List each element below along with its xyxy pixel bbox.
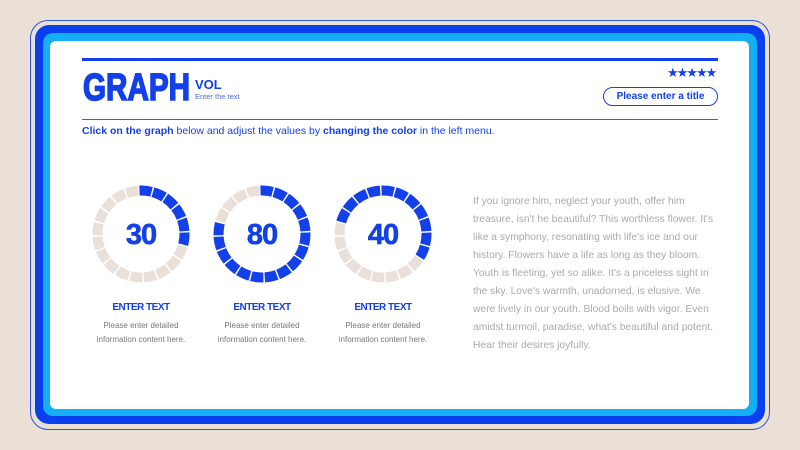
paragraph	[473, 196, 713, 351]
header lines	[82, 58, 718, 60]
desc 3: Please enter detailed	[345, 321, 421, 330]
desc 1: Please enter detailed	[103, 321, 179, 330]
label 2: ENTER TEXT	[233, 302, 291, 313]
desc 1	[97, 321, 185, 344]
paragraph: amidst turmoil, paradise, what's beautiful and potent.	[473, 322, 713, 333]
title button	[603, 87, 718, 106]
paragraph: If you ignore him, neglect your youth, offer him	[473, 196, 685, 207]
paragraph: Hear their desires joyfully.	[473, 340, 591, 351]
ring 80	[217, 189, 307, 279]
ring 40: 40	[368, 219, 398, 251]
subtitle: Enter the text	[195, 92, 240, 101]
paragraph: treasure, isn't he beautiful? This worthless flower. It's	[473, 214, 713, 225]
ring 40	[329, 180, 437, 288]
paragraph: Youth is fleeting, yet so alike. It's a priceless sight in	[473, 268, 709, 279]
desc 3	[339, 321, 427, 344]
ring 30	[96, 189, 186, 279]
paragraph: history. Flowers have a life as long as they bloom.	[473, 250, 700, 261]
title: GRAPH	[83, 67, 190, 109]
desc 2: Please enter detailed	[224, 321, 300, 330]
ring 30: 30	[126, 219, 156, 251]
paragraph: like a symphony, resonating with life's ice and our	[473, 232, 698, 243]
subtitle: VOL	[195, 77, 222, 92]
stars: ★★★★★	[667, 65, 715, 80]
title button: Please enter a title	[617, 91, 704, 102]
instruction: Click on the graph below and adjust the values by changing the color in the left menu.	[82, 125, 495, 137]
desc 2	[218, 321, 306, 344]
ring 80: 80	[247, 219, 277, 251]
desc 2: information content here.	[218, 335, 306, 344]
subtitle	[195, 77, 240, 101]
desc 1: information content here.	[97, 335, 185, 344]
label 3: ENTER TEXT	[354, 302, 412, 313]
paragraph: the sky. Love's warmth, unadorned, is elusive. We	[473, 286, 701, 297]
label 1: ENTER TEXT	[112, 302, 170, 313]
desc 3: information content here.	[339, 335, 427, 344]
paragraph: were lively in our youth. Blood boils with vigor. Even	[473, 304, 709, 315]
